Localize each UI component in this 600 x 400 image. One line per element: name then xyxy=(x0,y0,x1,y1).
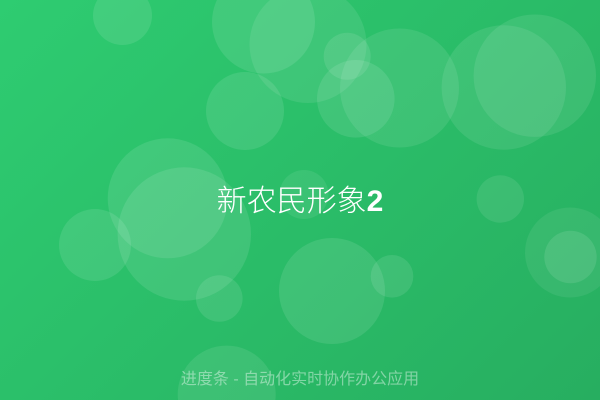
title: 新农民形象2 xyxy=(217,185,383,218)
footer subtitle: 进度条 - 自动化实时协作办公应用 xyxy=(181,371,419,388)
